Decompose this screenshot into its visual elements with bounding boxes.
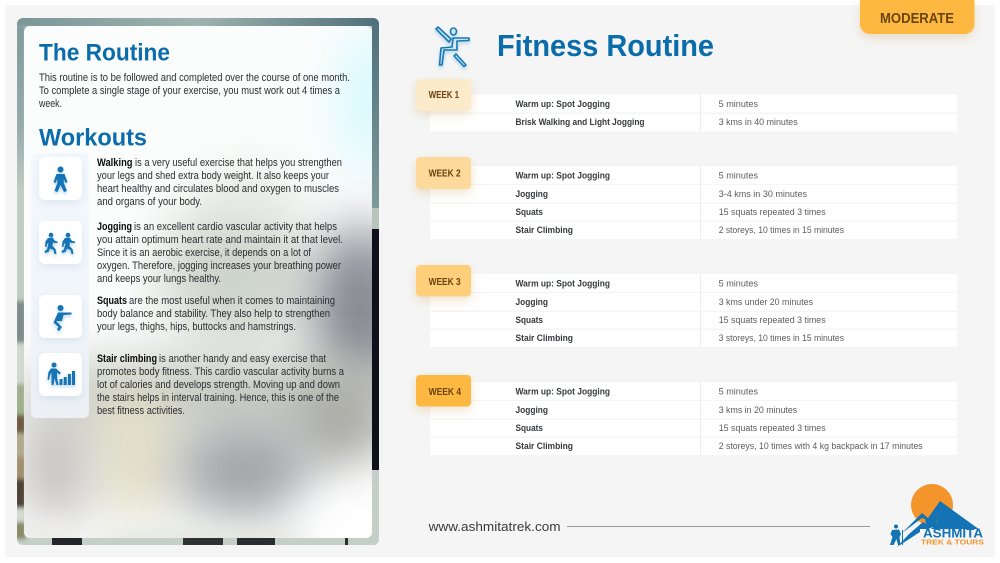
- text block: stair climbing: Stair climbing: [97, 353, 157, 365]
- row: jogging: [430, 185, 957, 202]
- icon: fitness pose outline: [436, 27, 469, 66]
- row: squats: 15 squats repeated 3 times: [719, 423, 826, 433]
- row: stair climbing: [430, 222, 957, 239]
- row: warm up: [430, 166, 957, 184]
- text block: squats: body balance and stability. They also help to strengthen: [97, 308, 330, 320]
- row: stair climbing: [430, 330, 957, 347]
- row: warm up: 5 minutes: [719, 278, 758, 288]
- row: stair climbing: Stair Climbing: [516, 441, 573, 451]
- text block: squats: are the most useful when it comes to maintaining: [129, 295, 335, 307]
- icon: jogging: [39, 221, 82, 264]
- logo sun: [911, 484, 953, 526]
- row: jogging: Jogging: [516, 189, 548, 199]
- text block: jogging: you attain optimum heart rate and maintain it at that level.: [97, 234, 343, 246]
- row: warm up: 5 minutes: [719, 99, 758, 109]
- panel: frosted glass routine card: [24, 26, 372, 538]
- row: jogging: 3 kms under 20 minutes: [719, 297, 813, 307]
- text block: squats: your legs, thighs, hips, buttocks and hamstrings.: [97, 321, 296, 333]
- text block: squats: [97, 295, 335, 333]
- text block: jogging: [97, 221, 343, 285]
- tag: week 2: WEEK 2: [429, 168, 461, 180]
- text block: jogging: Since it is an aerobic exercise, it depends on a lot of: [97, 247, 312, 259]
- row: squats: Squats: [516, 207, 543, 217]
- logo: Ashmita Trek & Tours: [890, 484, 985, 547]
- row: stair climbing: Stair Climbing: [516, 333, 573, 343]
- text block: stair climbing: [97, 353, 345, 417]
- panel: week 1: [416, 79, 957, 132]
- text block: walking: and organs of your body.: [97, 196, 202, 208]
- logo mountain: [897, 501, 980, 547]
- row: warm up: [430, 382, 957, 400]
- row: stair climbing: [430, 438, 957, 455]
- text block: routine intro: To complete a single stage of your exercise, you must work out 4 times a: [39, 85, 341, 97]
- logo snow: [930, 507, 964, 530]
- text block: jogging: and keeps your lungs healthy.: [97, 273, 221, 285]
- panel: photo backdrop: [14, 18, 379, 545]
- text block: routine intro: [38, 72, 350, 110]
- badge: moderate: MODERATE: [880, 11, 954, 27]
- text block: walking: Walking: [97, 157, 132, 169]
- logo wordmark: [920, 526, 985, 546]
- text block: walking: is a very useful exercise that helps you strengthen: [135, 157, 342, 169]
- tag: week 4: WEEK 4: [429, 387, 461, 398]
- row: warm up: Warm up: Spot Jogging: [516, 386, 610, 396]
- row: jogging: Jogging: [516, 297, 548, 307]
- icon: squats: [39, 295, 82, 338]
- row: squats: 15 squats repeated 3 times: [719, 207, 826, 217]
- row: jogging: [430, 401, 957, 418]
- icon: stair climbing: [39, 353, 82, 396]
- panel: week 3: [416, 265, 957, 347]
- logo wordmark: TREK & TOURS: [921, 538, 984, 546]
- tag: week 3: WEEK 3: [429, 277, 461, 288]
- text block: stair climbing: is another handy and easy exercise that: [159, 353, 326, 365]
- heading: The Routine: The Routine: [39, 40, 170, 66]
- text block: squats: Squats: [97, 295, 127, 307]
- row: jogging: Jogging: [516, 405, 548, 415]
- text block: jogging: Jogging: [97, 221, 132, 233]
- row: stair climbing: 2 storeys, 10 times with 4 kg backpack in 17 minutes: [719, 441, 923, 451]
- tag: week 2: [416, 157, 471, 189]
- row: squats: [430, 204, 957, 220]
- row: squats: 15 squats repeated 3 times: [719, 315, 826, 325]
- row: jogging: [430, 293, 957, 310]
- text block: stair climbing: promotes body fitness. This cardio vascular activity burns a: [97, 366, 345, 378]
- panel: week 2: [416, 157, 957, 239]
- tag: week 4: [416, 375, 471, 406]
- text block: stair climbing: lot of calories and develops strength. Moving up and down: [97, 379, 340, 391]
- panel: week 4: [416, 375, 957, 455]
- row: warm up: [430, 94, 957, 112]
- row: stair climbing: 2 storeys, 10 times in 15 minutes: [719, 225, 844, 235]
- text block: routine intro: This routine is to be followed and completed over the course of one month.: [39, 72, 350, 84]
- text block: walking: heart healthy and circulates blood and oxygen to muscles: [97, 183, 339, 195]
- logo hiker: [890, 524, 903, 545]
- icon: walking: [39, 157, 82, 200]
- row: stair climbing: Stair Climbing: [516, 225, 573, 235]
- footer: website: www.ashmitatrek.com: [428, 519, 561, 534]
- tag: week 3: [416, 265, 471, 296]
- row: stair climbing: 3 storeys, 10 times in 15 minutes: [719, 333, 844, 343]
- text block: routine intro: week.: [38, 98, 62, 110]
- tag: week 1: [416, 79, 471, 110]
- heading: Workouts: Workouts: [39, 124, 147, 152]
- row: brisk walking: 3 kms in 40 minutes: [719, 117, 798, 127]
- title: Fitness Routine: Fitness Routine: [497, 28, 714, 63]
- row: warm up: Warm up: Spot Jogging: [516, 170, 610, 180]
- logo wordmark: ASHMITA: [923, 526, 984, 540]
- row: squats: Squats: [516, 315, 543, 325]
- row: brisk walking: [430, 114, 957, 132]
- tag: week 1: WEEK 1: [429, 90, 459, 101]
- row: squats: Squats: [516, 423, 543, 433]
- row: brisk walking: Brisk Walking and Light Jogging: [516, 117, 644, 127]
- row: squats: [430, 312, 957, 328]
- row: squats: [430, 420, 957, 436]
- row: warm up: 5 minutes: [719, 386, 758, 396]
- text block: walking: your legs and shed extra body weight. It also keeps your: [97, 170, 329, 182]
- badge: moderate: [860, 0, 974, 34]
- text block: jogging: oxygen. Therefore, jogging increases your breathing power: [97, 260, 341, 272]
- row: warm up: 5 minutes: [719, 170, 758, 180]
- text block: stair climbing: best fitness activities.: [97, 405, 185, 417]
- row: warm up: [430, 274, 957, 292]
- text block: stair climbing: the stairs helps in interval training. Hence, this is one of the: [97, 392, 339, 404]
- text block: jogging: is an excellent cardio vascular activity that helps: [134, 221, 337, 233]
- icon column strip: [31, 153, 89, 418]
- row: jogging: 3 kms in 20 minutes: [719, 405, 798, 415]
- row: jogging: 3-4 kms in 30 minutes: [719, 189, 807, 199]
- row: warm up: Warm up: Spot Jogging: [516, 99, 610, 109]
- text block: walking: [97, 157, 342, 208]
- row: warm up: Warm up: Spot Jogging: [516, 278, 610, 288]
